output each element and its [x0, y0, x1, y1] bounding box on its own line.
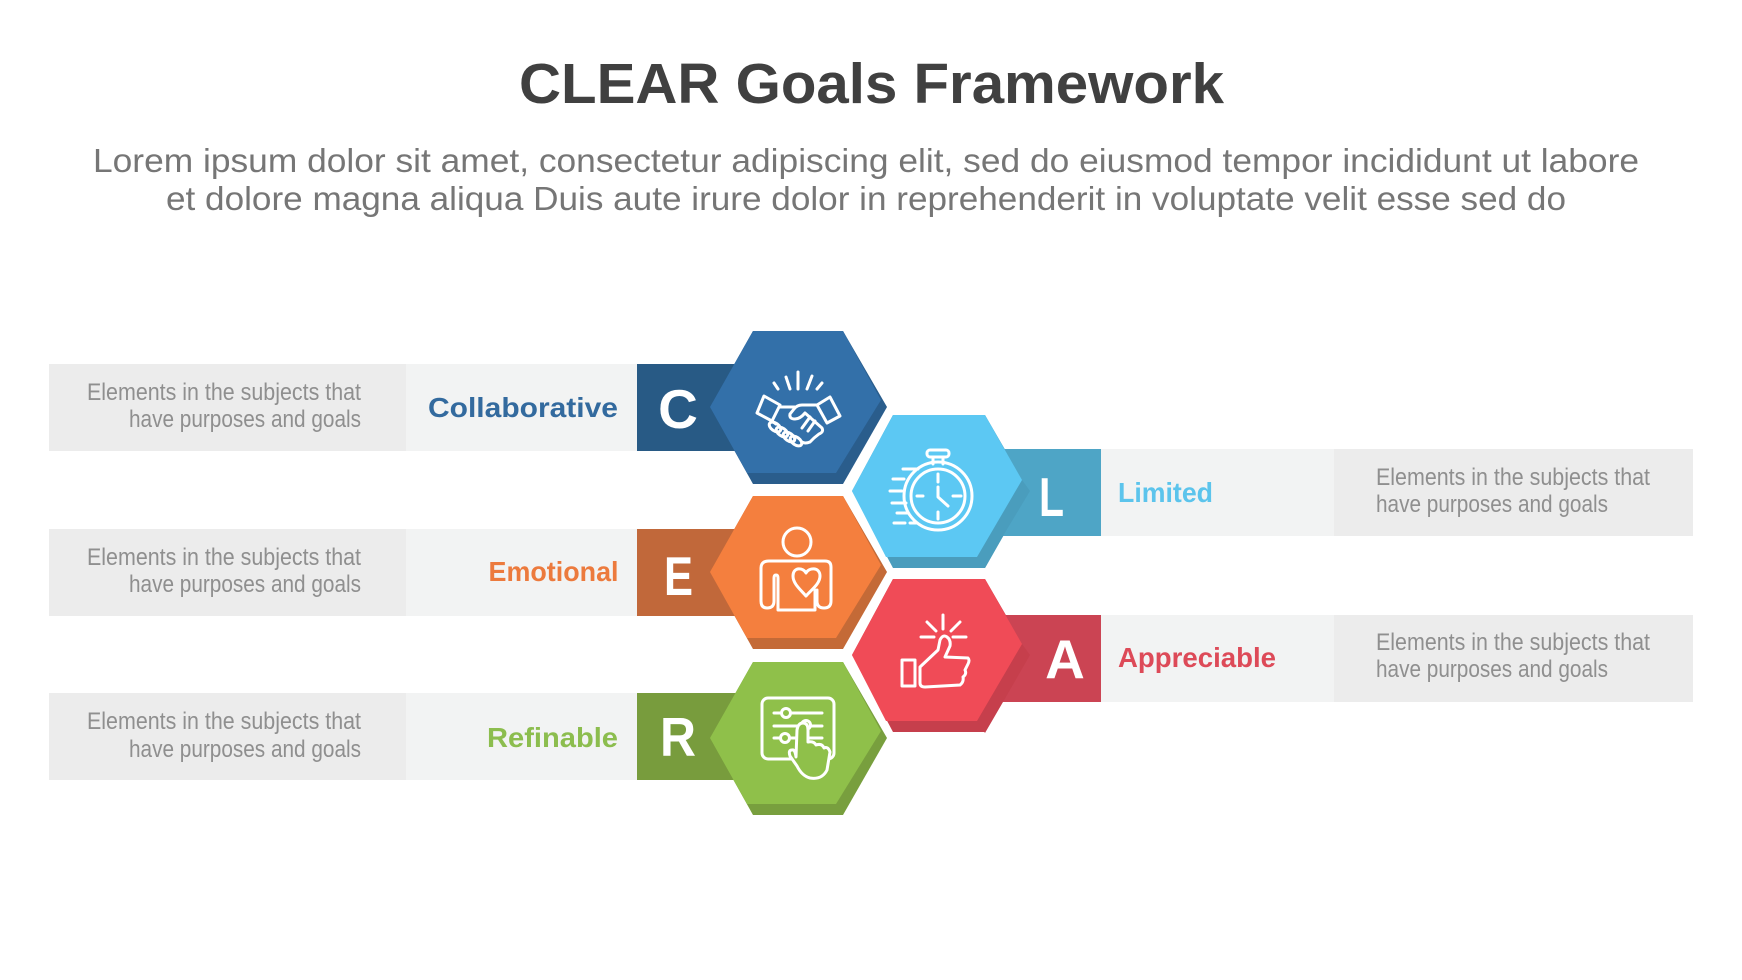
- letter box: R: R: [660, 706, 696, 768]
- description: Limited: have purposes and goals: [1376, 491, 1608, 518]
- icon: touch sliders: [762, 698, 834, 778]
- hexagon face: A: [852, 579, 1022, 721]
- letter box: A: [977, 615, 1101, 733]
- letter box: A: A: [1045, 628, 1085, 690]
- letter box: L: L: [1039, 466, 1064, 528]
- description: Limited: Elements in the subjects that: [1376, 464, 1650, 491]
- label: Emotional: Emotional: [488, 556, 618, 587]
- description: Appreciable: have purposes and goals: [1376, 656, 1608, 683]
- panel: Collaborative row: [49, 331, 887, 484]
- subtitle text: et dolore magna aliqua Duis aute irure dolor in reprehenderit in voluptate velit esse sed do: [166, 180, 1566, 217]
- hexagon face: L: [852, 415, 1022, 557]
- panel: Emotional row: [49, 496, 887, 649]
- letter box: R: [637, 693, 737, 780]
- letter box: C: [637, 364, 737, 451]
- description: Refinable: Elements in the subjects that: [87, 708, 361, 735]
- panel: Limited row: [852, 415, 1693, 568]
- description: Refinable: have purposes and goals: [129, 736, 361, 763]
- panel: Refinable row: [49, 662, 887, 815]
- title: CLEAR Goals Framework: [519, 52, 1224, 116]
- subtitle text: [93, 142, 1639, 217]
- description: Emotional: [87, 544, 361, 598]
- description: Refinable: [87, 708, 361, 763]
- icon: handshake: [757, 372, 840, 448]
- label: Appreciable: Appreciable: [1118, 642, 1276, 673]
- description: Limited: [1376, 464, 1650, 518]
- icon: thumbs up: [902, 615, 969, 687]
- panel: Appreciable row: [852, 579, 1693, 733]
- description: Collaborative: [87, 379, 361, 433]
- hexagon: C: [710, 331, 887, 484]
- letter box: E: [637, 529, 737, 616]
- letter box: L: [977, 449, 1101, 568]
- description: Collaborative: Elements in the subjects that: [87, 379, 361, 406]
- hexagon: A: [852, 579, 1029, 732]
- description: Emotional: have purposes and goals: [129, 571, 361, 598]
- label: Collaborative: Collaborative: [428, 392, 618, 423]
- hexagon: R: [710, 662, 887, 815]
- description: Appreciable: Elements in the subjects that: [1376, 629, 1650, 656]
- label: Limited: Limited: [1118, 477, 1213, 508]
- hexagon: E: [710, 496, 887, 649]
- description: Appreciable: [1376, 629, 1650, 683]
- icon: person with heart: [761, 528, 831, 610]
- description: Collaborative: have purposes and goals: [129, 406, 361, 433]
- hexagon: L: [852, 415, 1029, 568]
- letter box: E: E: [664, 545, 693, 607]
- letter box: C: C: [658, 378, 698, 440]
- label: Refinable: Refinable: [487, 722, 618, 753]
- icon: stopwatch: [890, 450, 972, 530]
- subtitle text: Lorem ipsum dolor sit amet, consectetur adipiscing elit, sed do eiusmod tempor incididunt ut labore: [93, 142, 1639, 179]
- description: Emotional: Elements in the subjects that: [87, 544, 361, 571]
